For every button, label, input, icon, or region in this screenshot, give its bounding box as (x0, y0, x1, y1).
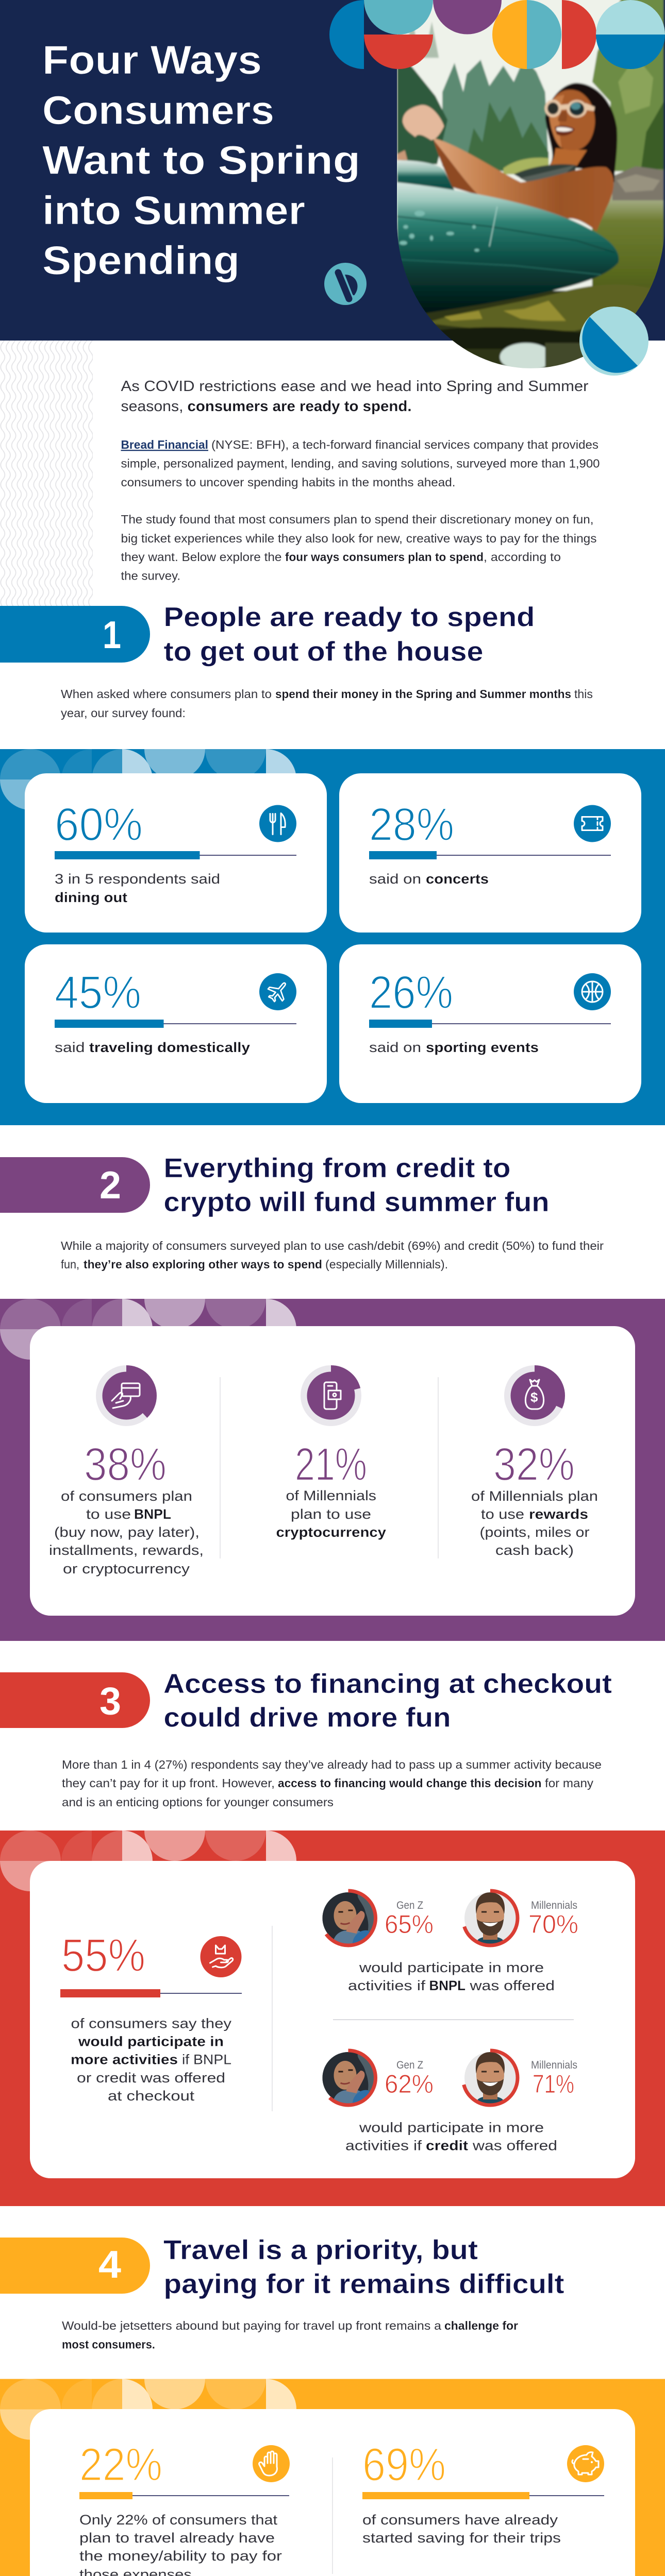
avatar: Millennials 71% (463, 2050, 577, 2105)
title: Want to Spring (42, 137, 360, 182)
stat group: credit Gen Z and Millennials: credit (426, 2138, 468, 2154)
icon: piggy bank (567, 2445, 604, 2482)
card: 26% sporting events: 26% (369, 967, 453, 1019)
section 2 intro text: they’re also exploring other ways to spend (84, 1258, 322, 1271)
stat group: credit Gen Z and Millennials (321, 2050, 577, 2154)
card: 26% sporting events (339, 944, 641, 1103)
title: Spending (42, 238, 240, 283)
section 4 intro text (62, 2319, 518, 2351)
stat: 55% participate: or credit was offered (77, 2070, 225, 2086)
section 3 number tab: 3 (99, 1680, 121, 1723)
stat: 22% have the money: plan to travel already have (79, 2530, 275, 2546)
stat: 32% rewards: of Millennials plan (471, 1488, 598, 1504)
section 2 heading (164, 1153, 550, 1217)
panel: section 2 purple (0, 1299, 665, 1641)
section 1 intro text: this (574, 687, 593, 701)
intro text: big ticket experiences while they also look for new, creative ways to pay for the things (121, 532, 597, 545)
card: 60% dining out (25, 773, 327, 933)
section 2 intro text: While a majority of consumers surveyed plan to use cash/debit (69%) and credit (50%) to fund their (61, 1239, 604, 1252)
section 4 heading (163, 2235, 564, 2299)
section 1 intro text: spend their money in the Spring and Summer months (275, 687, 571, 701)
section 2 intro text: (especially Millennials). (325, 1258, 448, 1271)
card: 28% concerts: 28% (369, 799, 454, 851)
icon: Bread Financial logo mark (324, 263, 367, 305)
stat: 38% BNPL: to use (86, 1506, 131, 1522)
section 3 intro text: for many (545, 1776, 594, 1790)
section 3 heading: Access to financing at checkout (163, 1669, 612, 1699)
stat: 38% BNPL: or cryptocurrency (63, 1561, 190, 1577)
card: 45% traveling domestically: said (55, 1040, 85, 1055)
decorative wave pattern: left strip (0, 341, 93, 606)
intro text: consumers to uncover spending habits in the months ahead. (121, 476, 455, 489)
stat group: credit Gen Z and Millennials: was offered (472, 2138, 557, 2154)
stat: 21% cryptocurrency: of Millennials (286, 1488, 376, 1503)
stat group: BNPL Gen Z and Millennials: was offered (469, 1978, 555, 1993)
stat: 21% cryptocurrency (276, 1368, 386, 1540)
decorative circle: hero bottom (579, 307, 649, 376)
avatar: Gen Z 62% (321, 2050, 434, 2105)
card: 60% dining out: 3 in 5 respondents said (55, 871, 220, 887)
section 1 intro text (61, 687, 593, 720)
section 2 intro text: fun, (61, 1258, 79, 1271)
stat: 55% participate: more activities (71, 2052, 178, 2067)
decorative circles: hero top row (329, 0, 665, 69)
card: 45% traveling domestically (25, 944, 327, 1103)
section 2 intro text (61, 1239, 604, 1271)
section 1 number tab: 1 (103, 613, 121, 656)
card: 60% dining out: 60% (55, 799, 143, 851)
section 4 intro text: most consumers. (62, 2338, 155, 2351)
stat: 32% rewards: 32% (493, 1439, 575, 1490)
stat: 32% rewards: rewards (529, 1506, 588, 1522)
stat: 55% participate (60, 1930, 242, 2104)
hero banner background (0, 0, 665, 341)
section 1 intro text: year, our survey found: (61, 706, 186, 720)
card: 28% concerts: said on (369, 871, 421, 887)
section 4 intro text: Would-be jetsetters abound but paying for travel up front remains a (62, 2319, 441, 2332)
stat: 21% cryptocurrency: 21% (295, 1439, 367, 1490)
avatar: Gen Z 65% (321, 1891, 434, 1945)
avatar: Millennials 70%: 70% (528, 1910, 578, 1939)
intro text (121, 378, 600, 582)
section 4 number tab (0, 2238, 150, 2294)
section 1 heading (164, 602, 535, 667)
stat group: BNPL Gen Z and Millennials: activities if (348, 1978, 426, 1993)
avatar: Millennials 70%: Millennials (531, 1900, 577, 1911)
section 2 number tab: 2 (99, 1163, 121, 1207)
panel: section 1 blue (0, 749, 665, 1125)
card: 26% sporting events: sporting events (426, 1040, 539, 1055)
stat group: BNPL Gen Z and Millennials (321, 1891, 578, 1993)
intro text: four ways consumers plan to spend (285, 550, 484, 564)
section 4 number tab: 4 (98, 2243, 121, 2286)
card: 45% traveling domestically: traveling domestically (89, 1040, 250, 1055)
section 3 intro text: More than 1 in 4 (27%) respondents say they’ve already had to pass up a summer activity because (62, 1758, 602, 1771)
intro text: , according to (484, 550, 561, 564)
stat: 22% have the money: 22% (79, 2439, 162, 2490)
stat: 38% BNPL (49, 1368, 204, 1577)
section 1 number tab (0, 606, 150, 663)
stat group: credit Gen Z and Millennials: activities if (345, 2138, 422, 2154)
stat: 32% rewards: cash back) (495, 1543, 574, 1558)
title: Four Ways (42, 37, 262, 82)
avatar: Millennials 71%: 71% (533, 2070, 574, 2098)
intro text: the survey. (121, 569, 180, 582)
section 3 number tab (0, 1672, 150, 1728)
icon: card and hand donut (99, 1368, 154, 1423)
card: 45% traveling domestically: 45% (55, 967, 141, 1019)
card: 28% concerts (339, 773, 641, 933)
title: into Summer (42, 188, 305, 233)
stat: 21% cryptocurrency: plan to use (291, 1506, 371, 1522)
stat: 55% participate: at checkout (108, 2088, 195, 2104)
stat: 38% BNPL: (buy now, pay later), (54, 1524, 200, 1540)
stat: 69% saving (362, 2439, 604, 2546)
stat group: BNPL Gen Z and Millennials: would participate in more (359, 1960, 544, 1975)
stat: 32% rewards: to use (481, 1506, 524, 1522)
icon: money bag donut: $ (530, 1389, 538, 1405)
avatar: Gen Z 65%: Gen Z (396, 1900, 423, 1911)
section 2 heading: Everything from credit to (164, 1153, 510, 1183)
intro text: seasons, (121, 398, 184, 415)
intro text: consumers are ready to spend. (188, 398, 411, 415)
icon: raised hand (253, 2445, 290, 2482)
panel: section 4 yellow (0, 2379, 665, 2576)
section 2 number tab (0, 1157, 150, 1213)
intro text: simple, personalized payment, lending, and saving solutions, surveyed more than 1,900 (121, 456, 600, 470)
stat: 69% saving: of consumers have already (362, 2512, 558, 2528)
stat: 55% participate: of consumers say they (71, 2015, 232, 2031)
stat: 21% cryptocurrency: cryptocurrency (276, 1524, 386, 1540)
stat: 55% participate: if BNPL (182, 2052, 231, 2067)
section 1 heading: People are ready to spend (164, 602, 535, 633)
section 3 intro text: they can’t pay for it up front. However, (62, 1776, 275, 1790)
section 3 heading (163, 1669, 612, 1733)
avatar: Millennials 71%: Millennials (531, 2059, 577, 2071)
icon: hand holding gift (200, 1936, 241, 1977)
section 3 intro text: access to financing would change this decision (278, 1776, 541, 1790)
icon: money bag donut (507, 1368, 562, 1423)
icon: phone and cash donut (304, 1368, 358, 1423)
stat group: BNPL Gen Z and Millennials: BNPL (429, 1978, 466, 1993)
stat: 38% BNPL: BNPL (134, 1506, 171, 1522)
stat: 69% saving: 69% (362, 2439, 446, 2490)
stat: 22% have the money: the money/ability to pay for (79, 2548, 282, 2564)
avatar: Gen Z 62%: 62% (385, 2070, 434, 2098)
title: Consumers (42, 88, 274, 133)
intro text: Bread Financial (121, 438, 208, 451)
section 3 intro text (62, 1758, 602, 1809)
section 2 heading: crypto will fund summer fun (164, 1187, 550, 1217)
avatar: Millennials 70% (463, 1891, 578, 1945)
card: 28% concerts: concerts (426, 871, 489, 887)
section 1 intro text: When asked where consumers plan to (61, 687, 272, 701)
intro text: As COVID restrictions ease and we head into Spring and Summer (121, 378, 589, 395)
stat: 22% have the money: Only 22% of consumers that (79, 2512, 278, 2528)
section 4 intro text: challenge for (444, 2319, 518, 2332)
stat: 55% participate: would participate in (78, 2034, 224, 2049)
title (42, 37, 360, 283)
stat: 38% BNPL: installments, rewards, (49, 1543, 204, 1558)
section 4 heading: Travel is a priority, but (163, 2235, 478, 2265)
stat: 38% BNPL: 38% (84, 1439, 167, 1490)
intro text: The study found that most consumers plan to spend their discretionary money on fun, (121, 513, 594, 526)
section 4 heading: paying for it remains difficult (164, 2269, 564, 2299)
card: 26% sporting events: said on (369, 1040, 421, 1055)
section 3 heading: could drive more fun (164, 1702, 451, 1733)
section 1 heading: to get out of the house (164, 637, 484, 667)
stat group: credit Gen Z and Millennials: would participate in more (359, 2120, 544, 2135)
intro text: (NYSE: BFH), a tech-forward financial services company that provides (211, 438, 598, 451)
section 3 intro text: and is an enticing options for younger consumers (62, 1795, 334, 1809)
hero photo: woman floating on a river tube (392, 0, 663, 379)
stat: 38% BNPL: of consumers plan (61, 1488, 192, 1504)
stat: 55% participate: 55% (61, 1930, 145, 1981)
stat: 32% rewards: (points, miles or (479, 1524, 590, 1540)
stat: 22% have the money (79, 2439, 290, 2576)
intro text: they want. Below explore the (121, 550, 281, 564)
card: 60% dining out: dining out (55, 890, 127, 905)
panel: section 3 red (0, 1831, 665, 2206)
stat: 69% saving: started saving for their trips (362, 2530, 561, 2546)
avatar: Gen Z 65%: 65% (385, 1910, 434, 1939)
avatar: Gen Z 62%: Gen Z (396, 2059, 423, 2071)
stat: 32% rewards (471, 1368, 598, 1558)
